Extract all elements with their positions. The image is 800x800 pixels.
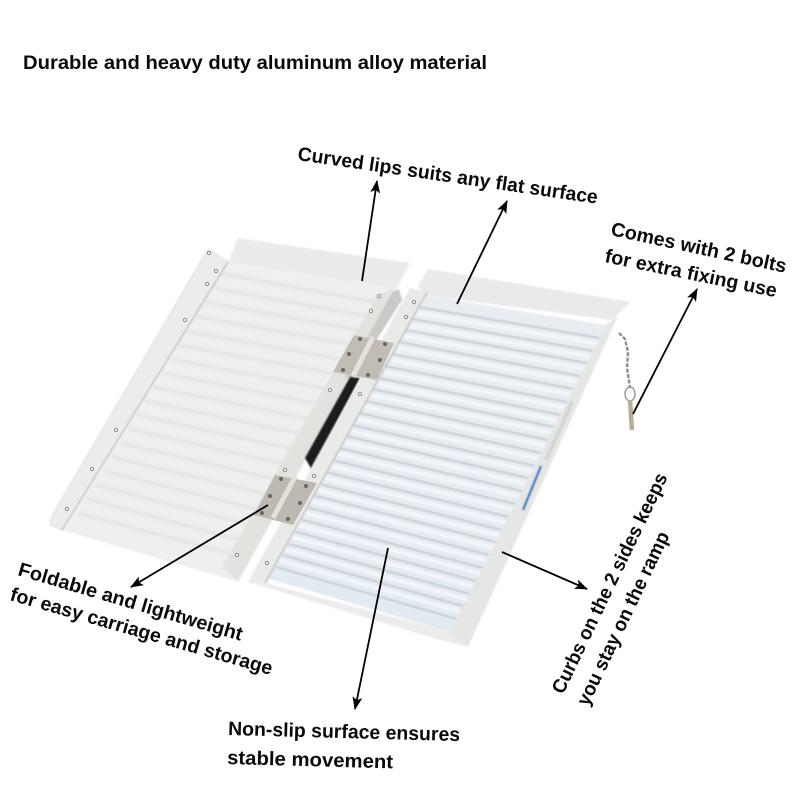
arrow: bolts	[633, 289, 697, 414]
arrow: curved lips right	[457, 201, 507, 304]
right panel surface	[266, 295, 606, 632]
bottom hinge	[254, 475, 317, 525]
right panel bottom edge	[248, 582, 468, 647]
left panel surface	[62, 262, 396, 582]
label: foldable: for easy carriage and storage	[8, 584, 275, 680]
label: foldable: Foldable and lightweight	[16, 559, 246, 646]
right panel slat highlights	[278, 313, 599, 612]
right panel curved lip	[418, 269, 631, 320]
icon: chain and fixing bolt	[619, 333, 635, 430]
label: non-slip	[227, 718, 461, 773]
curb label sticker	[523, 466, 541, 510]
curb fine print	[546, 402, 572, 460]
arrow: curbs	[502, 552, 587, 589]
right ramp panel	[248, 269, 631, 647]
left panel outer curb	[50, 249, 228, 530]
title: Durable and heavy duty aluminum alloy material	[23, 52, 487, 74]
left panel hinge-side curb	[222, 288, 393, 582]
top hinge	[333, 335, 394, 380]
right panel hinge-side curb	[248, 288, 427, 587]
label: bolts	[603, 218, 789, 302]
left ramp panel	[50, 238, 410, 582]
rivets	[65, 251, 416, 565]
label: bolts: Comes with 2 bolts	[609, 218, 789, 278]
right panel outer curb	[450, 316, 618, 647]
left panel curved lip	[228, 238, 410, 290]
label: curved lips: Curved lips suits any flat surface	[296, 143, 599, 209]
label: curbs: you stay on the ramp	[573, 528, 674, 709]
label: non-slip: Non-slip surface ensures	[228, 718, 461, 746]
arrow: non-slip surface	[355, 548, 388, 709]
right panel slat grooves	[273, 307, 600, 619]
label: curbs: Curbs on the 2 sides keeps	[548, 469, 673, 697]
black strap between panels	[305, 377, 360, 470]
label: non-slip: stable movement	[227, 747, 394, 773]
label: bolts: for extra fixing use	[603, 245, 779, 302]
arrow: curved lips left	[362, 181, 377, 281]
arrow: hinge	[131, 505, 268, 587]
gap behind hinges	[345, 289, 402, 378]
